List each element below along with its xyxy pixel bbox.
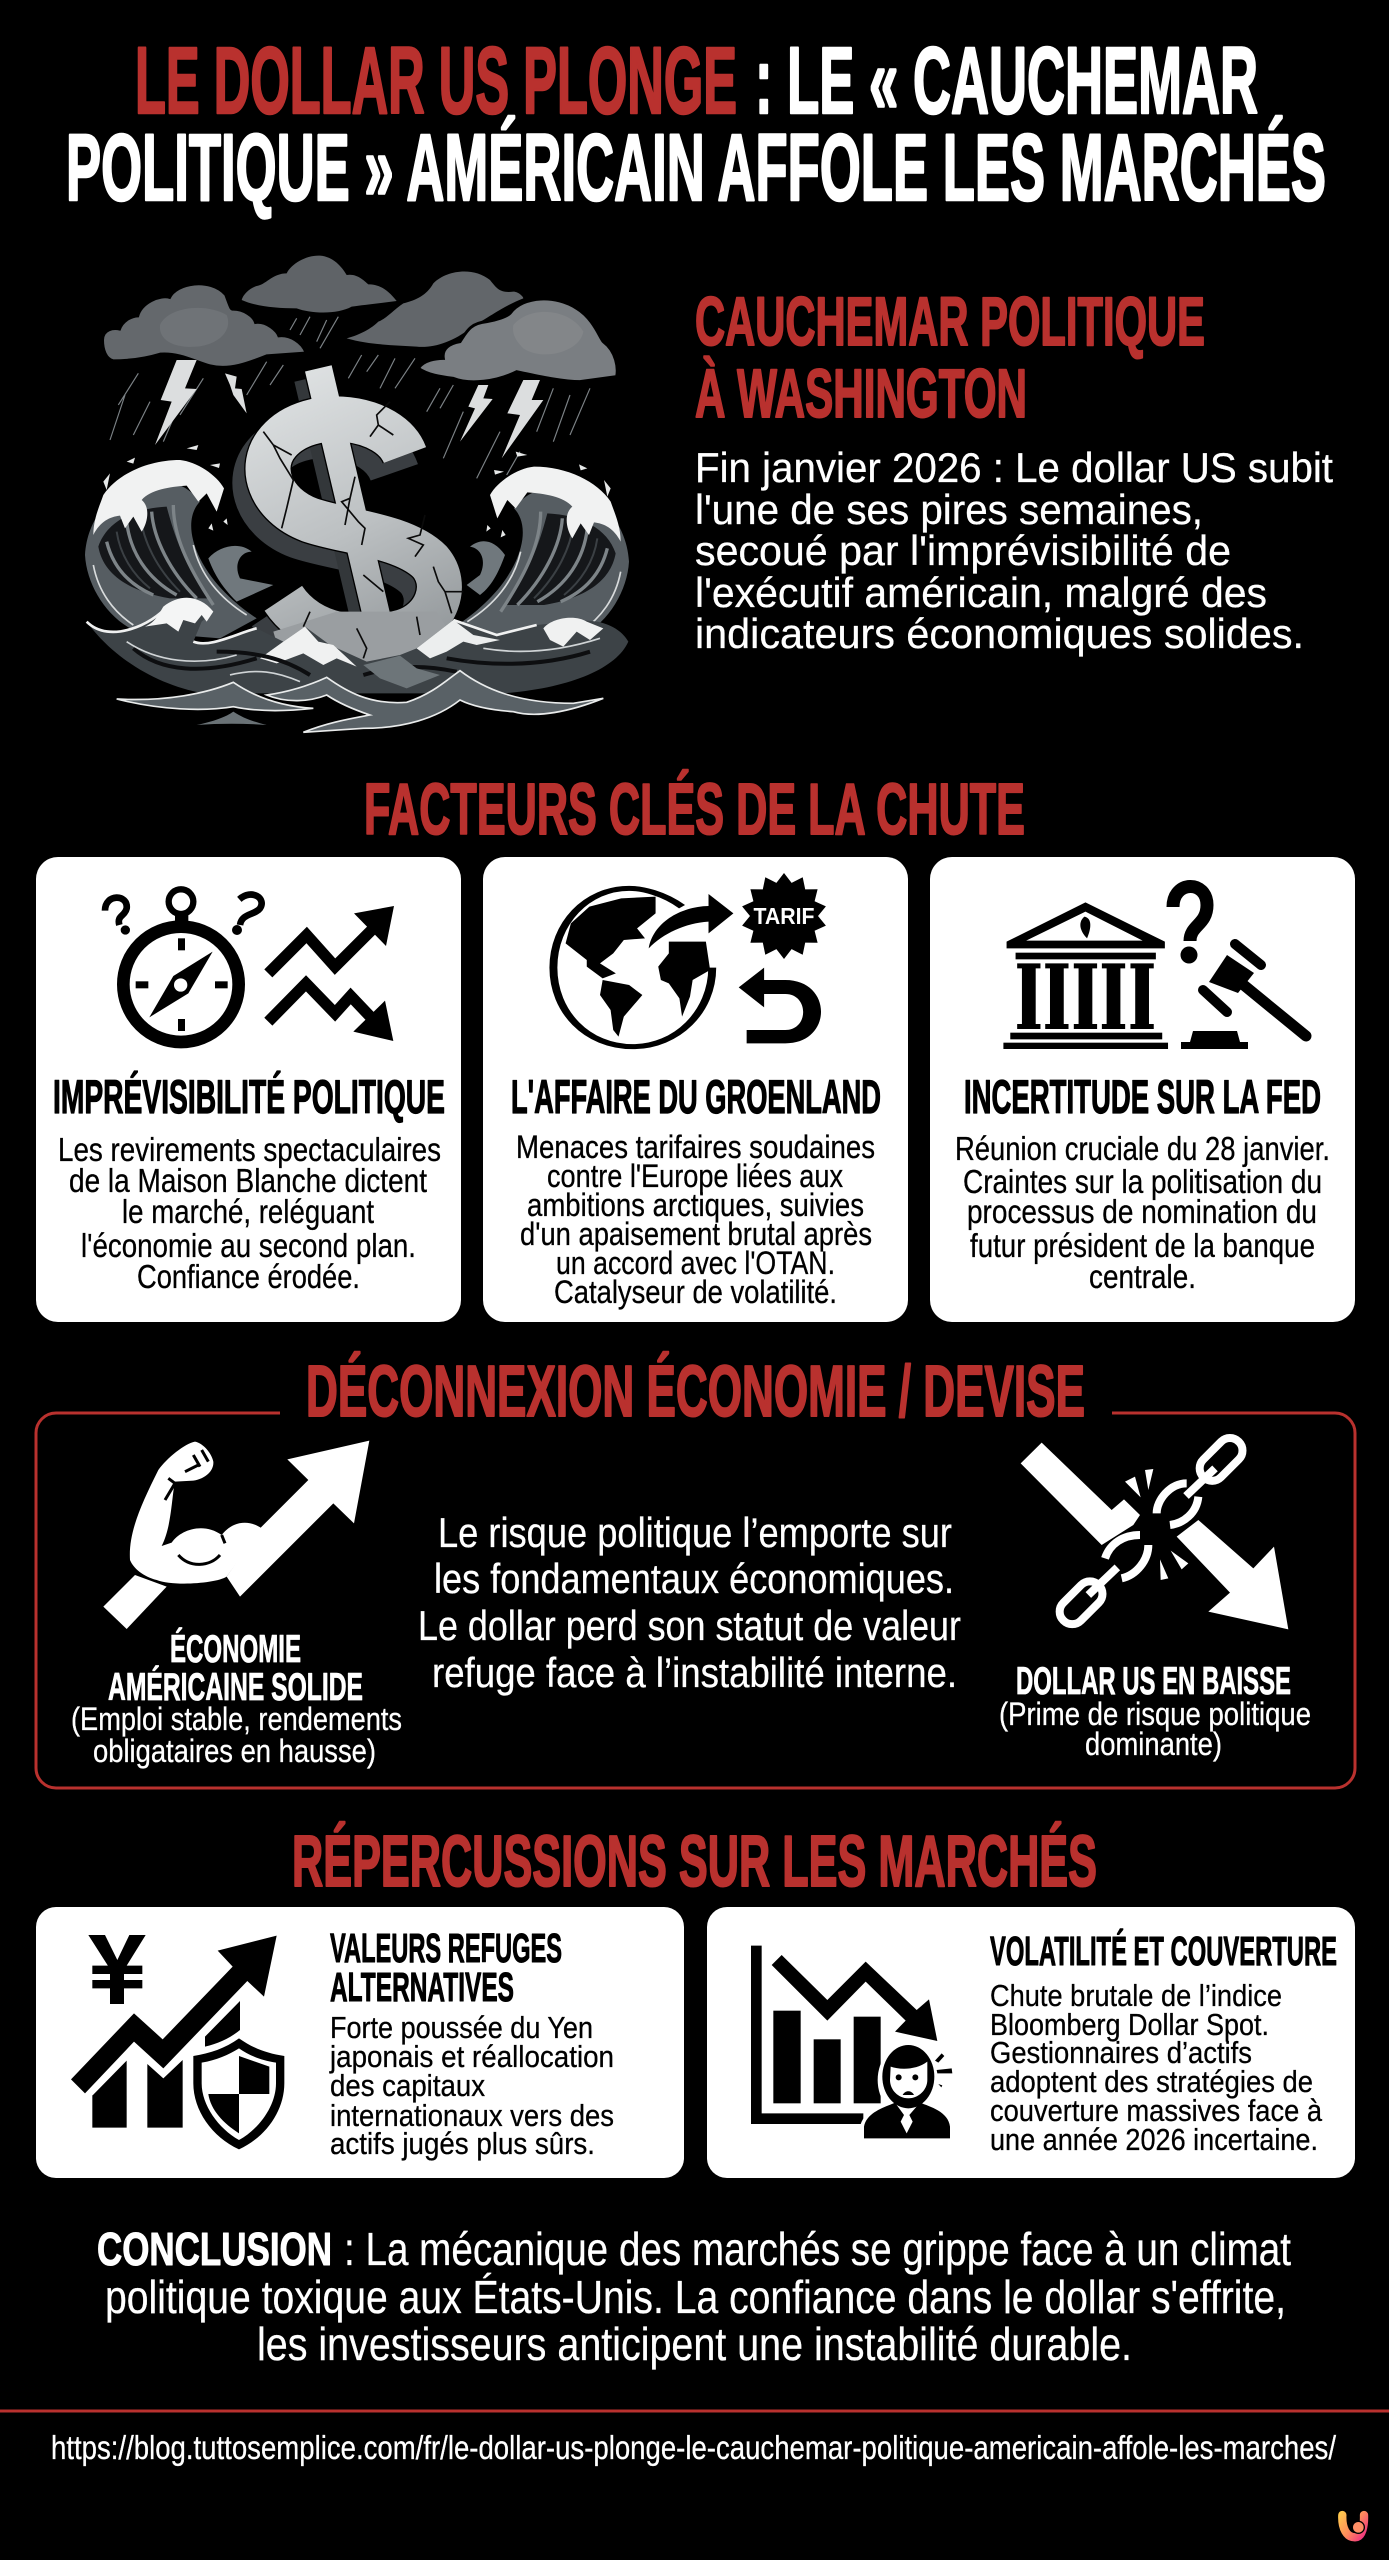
card heading: VALEURS REFUGES xyxy=(330,1925,562,1971)
card text: japonais et réallocation xyxy=(329,2039,614,2074)
heading: Cauchemar politique: À WASHINGTON xyxy=(695,355,1027,432)
panel: déconnexion économie / devise xyxy=(36,1352,1355,1788)
central text xyxy=(418,1509,961,1696)
icon: globe with tariff arrows: TARIF xyxy=(754,903,814,929)
panel: imprévisibilité politique xyxy=(36,857,461,1322)
card text: l'économie au second plan. xyxy=(81,1227,416,1264)
illustration: cracked dollar in storm xyxy=(85,256,629,732)
label: dollar en baisse: (Prime de risque politique xyxy=(999,1696,1311,1732)
heading: Cauchemar politique xyxy=(695,283,1205,432)
conclusion: les investisseurs anticipent une instabilité durable. xyxy=(257,2318,1132,2370)
card text: un accord avec l'OTAN. xyxy=(556,1245,835,1281)
card text: actifs jugés plus sûrs. xyxy=(330,2126,595,2161)
lightning xyxy=(155,360,543,458)
card text: de la Maison Blanche dictent xyxy=(69,1162,427,1199)
card text xyxy=(58,1131,441,1295)
intro text: l'exécutif américain, malgré des xyxy=(695,569,1267,616)
title xyxy=(66,28,1326,221)
card text xyxy=(516,1129,875,1310)
intro text: Fin janvier 2026 : Le dollar US subit xyxy=(695,444,1333,491)
intro text xyxy=(695,444,1333,657)
card text: une année 2026 incertaine. xyxy=(990,2122,1318,2157)
card text: couverture massives face à xyxy=(990,2093,1323,2128)
label: dollar en baisse: dominante) xyxy=(1085,1726,1222,1762)
card text: Gestionnaires d’actifs xyxy=(990,2035,1252,2070)
panel: l'affaire du Groenland xyxy=(483,857,908,1322)
card text: Bloomberg Dollar Spot. xyxy=(990,2007,1269,2042)
card text: des capitaux xyxy=(330,2068,485,2103)
clouds xyxy=(242,256,397,312)
central text: Le dollar perd son statut de valeur xyxy=(418,1602,961,1649)
icon: flexed arm with rising arrow xyxy=(103,1441,369,1629)
back waves xyxy=(85,445,257,638)
panel: valeurs refuges xyxy=(36,1907,684,2178)
card text xyxy=(990,1978,1323,2157)
icon: globe with tariff arrows xyxy=(553,873,826,1047)
title: LE DOLLAR US PLONGE xyxy=(135,28,737,134)
label: économie solide: ÉCONOMIE xyxy=(170,1627,301,1671)
rain xyxy=(110,317,590,478)
icon: bank, question mark and gavel xyxy=(1003,886,1306,1049)
label: dollar en baisse xyxy=(999,1660,1311,1762)
card heading: ALTERNATIVES xyxy=(330,1964,514,2010)
card text: Craintes sur la politisation du xyxy=(963,1163,1322,1200)
card text: contre l'Europe liées aux xyxy=(547,1158,843,1194)
central text: refuge face à l’instabilité interne. xyxy=(432,1649,957,1696)
conclusion: CONCLUSION xyxy=(97,2223,332,2275)
icon: falling arrow with broken chain xyxy=(1021,1433,1288,1629)
cracks xyxy=(263,402,463,658)
card text: d'un apaisement brutal après xyxy=(520,1216,872,1252)
dollar sign xyxy=(257,368,453,665)
card heading xyxy=(330,1925,562,2010)
icon: compass and zigzag arrows xyxy=(105,889,394,1042)
label: économie solide xyxy=(71,1627,402,1769)
card text: ambitions arctiques, suivies xyxy=(527,1187,864,1223)
card text: Catalyseur de volatilité. xyxy=(554,1274,837,1310)
label: économie solide: AMÉRICAINE SOLIDE xyxy=(108,1665,363,1709)
panel: incertitude sur la Fed xyxy=(930,857,1355,1322)
card text: futur président de la banque xyxy=(970,1227,1315,1264)
label: économie solide: obligataires en hausse) xyxy=(93,1733,376,1769)
card text: internationaux vers des xyxy=(330,2098,614,2133)
icon: falling chart and worried man xyxy=(751,1946,953,2140)
card text: Confiance érodée. xyxy=(137,1258,360,1295)
icon: yen, rising arrow and shield xyxy=(71,1935,284,2149)
front waves xyxy=(87,598,628,693)
card heading: L'AFFAIRE DU GROENLAND xyxy=(511,1070,881,1123)
central text: les fondamentaux économiques. xyxy=(434,1555,954,1602)
label: économie solide: (Emploi stable, rendements xyxy=(71,1701,402,1737)
card text: adoptent des stratégies de xyxy=(990,2064,1313,2099)
icon: logo xyxy=(1342,2515,1365,2537)
central text: Le risque politique l’emporte sur xyxy=(438,1509,952,1556)
intro text: indicateurs économiques solides. xyxy=(695,610,1304,657)
card text: Les revirements spectaculaires xyxy=(58,1131,441,1168)
card text xyxy=(955,1130,1330,1295)
card text: centrale. xyxy=(1089,1258,1196,1295)
conclusion xyxy=(97,2223,1291,2370)
card text: Forte poussée du Yen xyxy=(330,2010,593,2045)
card text: le marché, reléguant xyxy=(122,1193,374,1230)
card text: Chute brutale de l’indice xyxy=(990,1978,1282,2013)
card text: Menaces tarifaires soudaines xyxy=(516,1129,875,1165)
card heading: IMPRÉVISIBILITÉ POLITIQUE xyxy=(53,1070,445,1123)
intro text: secoué par l'imprévisibilité de xyxy=(695,527,1231,574)
card text xyxy=(329,2010,614,2161)
card text: processus de nomination du xyxy=(967,1193,1317,1230)
panel: volatilité et couverture xyxy=(707,1907,1355,2178)
intro text: l'une de ses pires semaines, xyxy=(695,486,1203,533)
